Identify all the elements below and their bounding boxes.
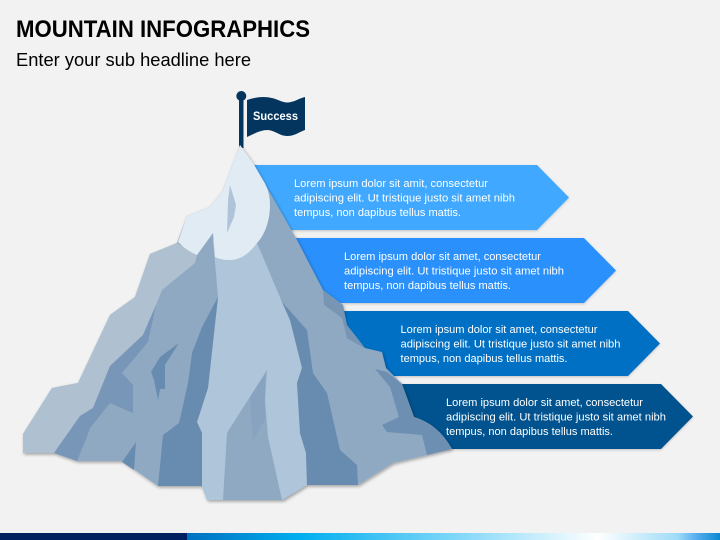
- left central dark face: [158, 297, 218, 486]
- central light ridge: [197, 225, 307, 500]
- mountain: [23, 145, 452, 500]
- arrow 4 text: tempus, non dapibus tellus mattis.: [446, 426, 613, 438]
- snow crevice: [227, 185, 236, 233]
- flag: [236, 91, 305, 148]
- back left face: [23, 243, 197, 453]
- arrow 4 text: Lorem ipsum dolor sit amet, consectetur: [446, 397, 643, 409]
- arrow 3: [335, 311, 660, 376]
- right lower strip: [375, 369, 452, 455]
- arrow 1 text: Lorem ipsum dolor sit amit, consectetur: [294, 178, 488, 190]
- mountain silhouette with shadow: [23, 145, 452, 500]
- bottom bar: [0, 533, 720, 540]
- arrow 2: [285, 238, 616, 303]
- arrow 3 text: tempus, non dapibus tellus mattis.: [400, 353, 568, 365]
- title: MOUNTAIN INFOGRAPHICS: [16, 16, 310, 43]
- central patch: [250, 375, 265, 440]
- flag banner: [247, 97, 305, 137]
- right upper strip: [323, 290, 365, 348]
- arrow 1: [245, 165, 569, 230]
- arrow 4: [390, 384, 693, 449]
- snow cap: [178, 145, 270, 260]
- lower crevice: [122, 442, 136, 470]
- flag pole: [236, 91, 246, 148]
- arrow 1 text: adipiscing elit. Ut tristique justo sit amet nibh: [294, 192, 515, 204]
- subtitle: Enter your sub headline here: [16, 49, 251, 70]
- crevice: [151, 343, 179, 400]
- arrow 2 text: tempus, non dapibus tellus mattis.: [344, 280, 511, 292]
- arrow 2 text: adipiscing elit. Ut tristique justo sit amet nibh: [344, 266, 564, 278]
- arrow 1 text: tempus, non dapibus tellus mattis.: [294, 207, 461, 219]
- flag label: Success: [253, 109, 298, 123]
- left shadow face: [54, 305, 156, 461]
- arrow 4 text: adipiscing elit. Ut tristique justo sit amet nibh: [446, 412, 666, 424]
- arrow 3 text: adipiscing elit. Ut tristique justo sit amet nibh: [400, 338, 621, 350]
- arrow 3 text: Lorem ipsum dolor sit amet, consectetur: [400, 324, 598, 336]
- right central dark face: [282, 302, 358, 485]
- arrow 2 text: Lorem ipsum dolor sit amet, consectetur: [344, 251, 541, 263]
